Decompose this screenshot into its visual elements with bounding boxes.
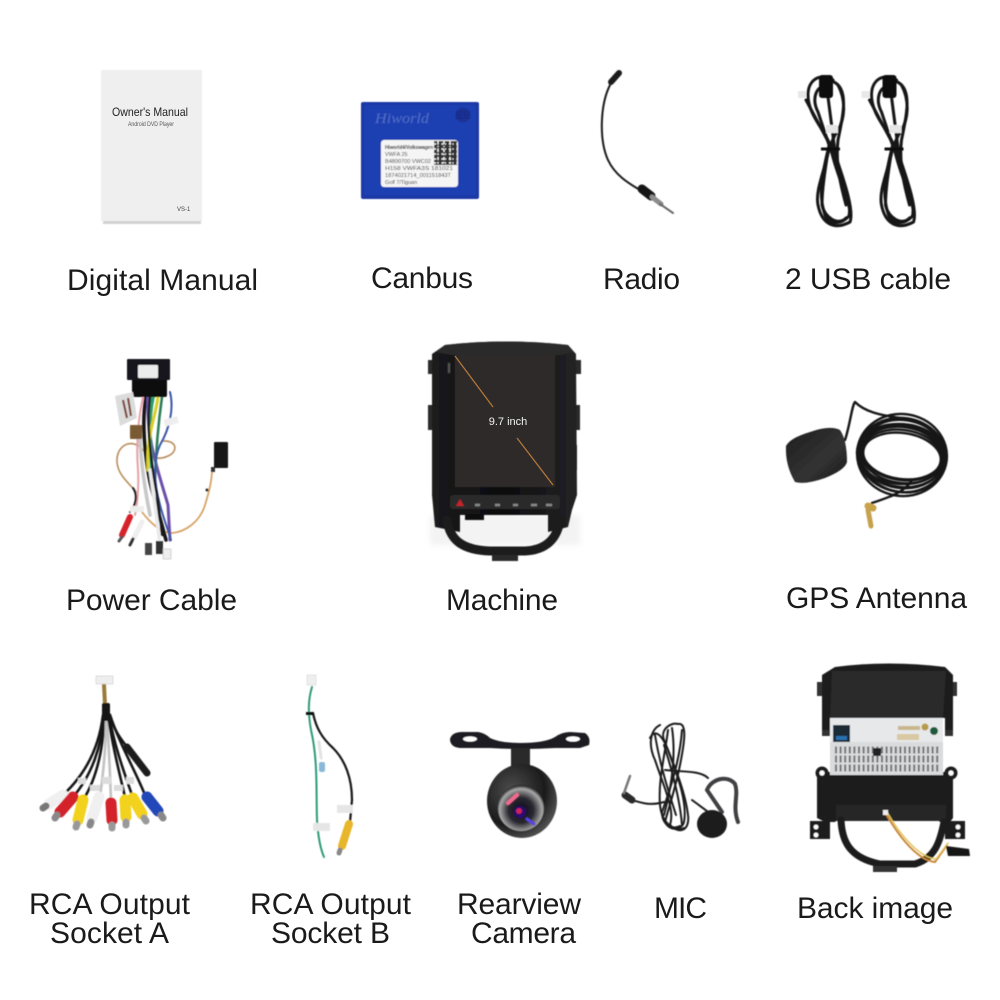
power harness white side connector — [115, 392, 142, 439]
camera lens — [498, 785, 544, 831]
label: rearview camera: Rearview — [457, 888, 581, 921]
machine lower arch frame — [447, 520, 560, 551]
item: rca output socket a — [43, 676, 163, 828]
socket a black jack — [127, 747, 147, 773]
socket a rca plugs — [43, 795, 163, 828]
canbus sticker: B4800700 VWC02 — [385, 159, 431, 165]
manual cover title: Owner's Manual — [112, 105, 188, 119]
gps gold connector — [868, 506, 873, 526]
back lower housing — [817, 772, 953, 822]
label: machine: Machine — [446, 584, 558, 617]
radio antenna plug — [642, 189, 673, 213]
label: digital manual: Digital Manual — [67, 264, 258, 297]
item: microphone — [624, 724, 738, 838]
socket a wires — [63, 685, 145, 800]
label: mic: MIC — [654, 892, 707, 925]
machine mic holes — [448, 363, 450, 373]
radio top connector — [611, 73, 619, 82]
camera mounting bracket — [450, 732, 590, 749]
label: rca output socket b — [250, 888, 412, 950]
item: gps antenna — [786, 402, 953, 526]
camera stem — [511, 748, 530, 772]
label: rearview camera — [457, 888, 581, 950]
power harness black side plug — [206, 442, 228, 492]
screen diagonal lower — [517, 438, 553, 485]
manual cover subtitle: Android DVD Player — [128, 122, 174, 128]
canbus sticker: Golf 7/Tiguan — [385, 180, 417, 186]
label: gps antenna: GPS Antenna — [786, 582, 967, 615]
label: back image: Back image — [797, 892, 953, 925]
camera ball housing — [487, 764, 557, 838]
usb cable 1 — [798, 75, 851, 226]
socket b yellow rca — [339, 824, 349, 853]
item: digital manual — [101, 70, 202, 224]
socket b black wire — [313, 713, 352, 822]
back lower arch — [841, 820, 944, 864]
item: radio adapter cable — [602, 73, 673, 213]
label: power cable: Power Cable — [66, 584, 237, 617]
back wire harness — [883, 810, 948, 862]
canbus sticker — [381, 140, 458, 187]
power harness main connector — [127, 359, 170, 397]
back mounting ears — [810, 766, 965, 839]
back side tabs — [817, 682, 957, 736]
usb cable 2 — [862, 75, 914, 226]
power harness rca plugs — [119, 517, 142, 545]
machine top hood — [436, 342, 574, 355]
label: rca output socket b: Socket B — [271, 917, 390, 950]
gps coiled cable — [845, 402, 953, 503]
item: rca output socket b — [306, 675, 353, 857]
manual model code: VS-1 — [177, 207, 191, 213]
item: two usb cables — [798, 75, 914, 226]
radio cable — [602, 85, 640, 190]
back upper housing — [822, 664, 953, 730]
machine floor shadow — [430, 515, 580, 545]
machine button strip — [450, 495, 560, 509]
label: 2 usb cable: 2 USB cable — [785, 263, 951, 296]
canbus embossed logo: Hiworld — [374, 111, 430, 127]
mic clip — [707, 779, 738, 822]
label: rca output socket a — [29, 888, 191, 950]
machine rear block — [465, 514, 484, 520]
canbus sticker: Hiworld4/Volkswagen — [385, 145, 433, 151]
canbus sticker: VWFA 25 — [385, 152, 407, 158]
socket b wire tags — [313, 805, 353, 831]
machine body — [432, 342, 577, 532]
item: back image of machine — [810, 664, 970, 872]
label: rca output socket b: RCA Output — [250, 888, 412, 921]
machine bottom clip — [492, 555, 518, 561]
screen size text: 9.7 inch — [489, 416, 527, 428]
socket b tie and blue tag — [306, 712, 325, 772]
item: canbus box — [361, 102, 479, 199]
power harness wires — [117, 392, 212, 545]
label: rearview camera: Camera — [471, 917, 576, 950]
mic 3.5mm plug — [624, 776, 632, 800]
label: rca output socket a: RCA Output — [29, 888, 191, 921]
back button board — [836, 805, 946, 821]
item: rearview camera — [450, 732, 590, 838]
canbus sticker: 1874021714_001151843T — [385, 173, 452, 179]
machine side tabs — [428, 360, 581, 470]
label: canbus: Canbus — [371, 262, 473, 295]
label: rca output socket a: Socket A — [50, 917, 169, 950]
canbus speaker holes — [456, 108, 470, 122]
manual booklet — [101, 70, 202, 224]
mic coiled cable — [632, 724, 712, 830]
label: radio: Radio — [603, 263, 680, 296]
gps antenna puck — [786, 428, 847, 483]
back connector — [946, 846, 970, 856]
item: head unit machine — [428, 342, 581, 561]
machine screen — [455, 355, 555, 487]
power harness terminal plugs — [130, 416, 179, 559]
canbus sticker: H158 VWFA3S 181021 — [385, 166, 453, 172]
screen diagonal upper — [455, 356, 493, 407]
socket b plug — [307, 675, 316, 685]
socket a wire tags — [78, 777, 134, 791]
back metal chassis — [830, 718, 943, 775]
socket a connector and loom — [96, 676, 113, 721]
item: power cable harness — [115, 359, 228, 559]
mic foam head — [697, 810, 727, 838]
back bottom clip — [873, 866, 897, 872]
canbus blue case — [361, 102, 479, 199]
socket b green wire — [309, 687, 324, 857]
